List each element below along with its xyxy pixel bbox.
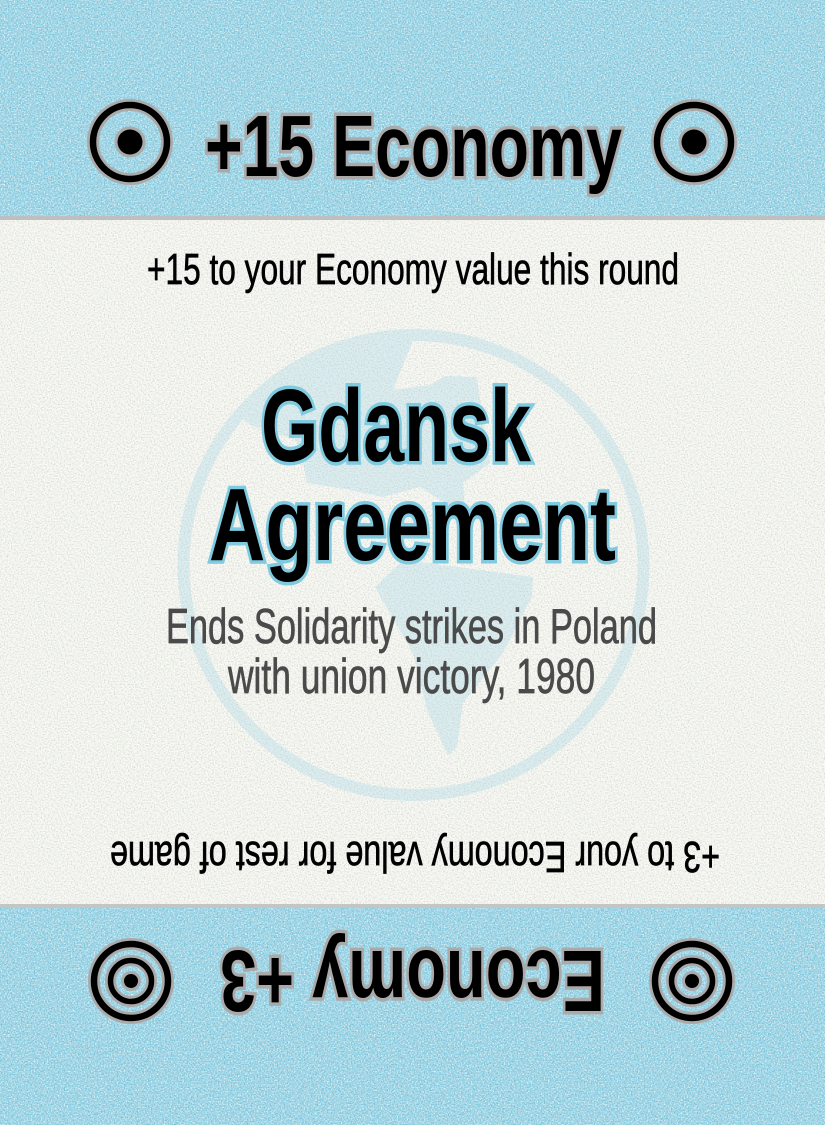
- band grain texture: [0, 0, 825, 216]
- icon: top left target: [93, 105, 167, 179]
- title: Gdansk Agreement: Gdansk: [261, 368, 532, 483]
- icon: bottom left target: [94, 944, 168, 1018]
- text: description: with union victory, 1980: [227, 650, 595, 704]
- panel: bottom blue band: [0, 904, 825, 1125]
- heading: Economy +3 (inverted): Economy +3: [220, 932, 605, 1029]
- panel: top blue band: [0, 0, 825, 220]
- title: Gdansk Agreement: [209, 368, 616, 582]
- title: Gdansk Agreement: Agreement: [209, 467, 616, 582]
- paper grain texture: [0, 216, 825, 908]
- icon: bottom right target: [655, 944, 729, 1018]
- watermark: globe: [184, 335, 644, 795]
- icon: top right target: [657, 105, 731, 179]
- text: description: [166, 600, 657, 704]
- heading: +15 Economy: +15 Economy: [205, 98, 622, 195]
